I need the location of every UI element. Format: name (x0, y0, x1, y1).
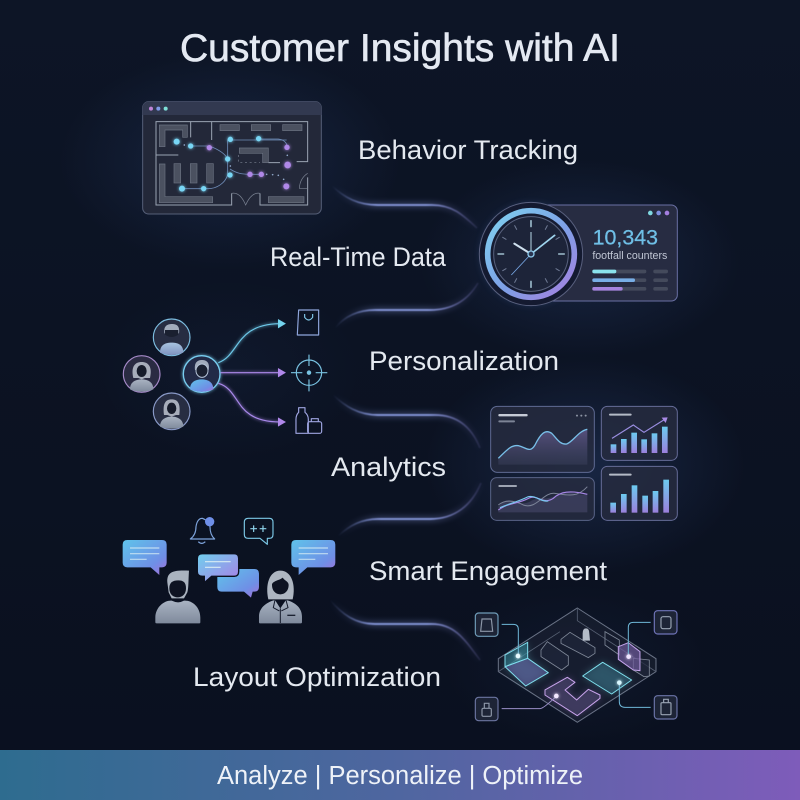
speech bubbles (123, 540, 335, 598)
line chart card (491, 406, 594, 472)
label: Behavior Tracking: Behavior Tracking (358, 135, 578, 165)
trend bar card (601, 406, 677, 460)
icon tile: bottom right bag (654, 696, 677, 719)
zone: center highlight (545, 677, 600, 716)
label: Smart Engagement: Smart Engagement (369, 556, 608, 586)
icon: notification bell (190, 517, 215, 543)
panel: behavior tracking floor plan (143, 102, 321, 214)
panel: clock and footfall counter (479, 202, 677, 306)
person: woman (259, 571, 302, 623)
footfall card (540, 205, 677, 301)
zone: right highlight (583, 643, 640, 694)
label: Real-Time Data: Real-Time Data (270, 242, 447, 272)
footer banner (0, 750, 800, 800)
counter caption: footfall counters (592, 250, 667, 262)
connector lines (330, 186, 481, 660)
person: man (155, 571, 200, 623)
panel: personalization diagram (123, 310, 327, 433)
area comparison card (491, 478, 594, 520)
customer avatars (123, 319, 220, 430)
icon: target (291, 355, 327, 391)
title: Customer Insights with AI (180, 27, 620, 70)
label: Analytics: Analytics (331, 452, 446, 482)
zone: left highlight (505, 642, 548, 686)
bar chart card (601, 466, 677, 520)
icon: products (296, 408, 322, 433)
label: Layout Optimization: Layout Optimization (193, 662, 441, 692)
panel: smart engagement (123, 517, 335, 623)
clock (479, 202, 583, 306)
icon: shopping bag (297, 310, 319, 335)
arrows (218, 324, 280, 422)
footer text: Analyze | Personalize | Optimize (217, 762, 583, 790)
icon tile: bottom left lock (475, 697, 498, 721)
counter value: 10,343 (593, 226, 658, 250)
icon tile: top right jar (654, 611, 677, 634)
icon tile: top left bag (475, 613, 498, 636)
label: Personalization: Personalization (369, 346, 559, 376)
panel: isometric store layout (475, 608, 677, 722)
icon: chat sparkle (244, 518, 273, 544)
panel: analytics dashboards (491, 406, 677, 520)
